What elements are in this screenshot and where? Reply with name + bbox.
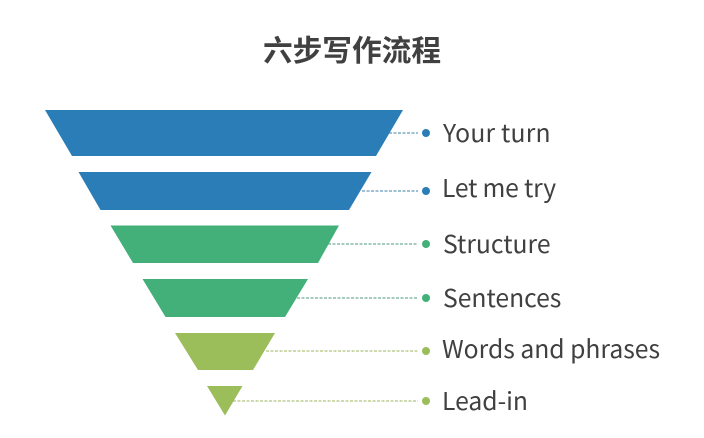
label: Structure: Structure — [443, 225, 551, 261]
label: Let me try — [362, 169, 556, 205]
title: 六步写作流程 — [263, 27, 441, 70]
label: Words and phrases: Words and phrases — [442, 330, 660, 366]
label: Your turn: Your turn — [442, 114, 551, 150]
funnel layer: Your turn — [45, 110, 403, 156]
label: Words and phrases — [266, 330, 660, 366]
funnel layer: Structure — [110, 226, 339, 263]
funnel layer: Let me try — [78, 172, 372, 210]
label: Sentences — [297, 279, 561, 315]
funnel layer: Sentences — [142, 279, 308, 317]
label: Lead-in — [233, 382, 528, 418]
label: Your turn — [389, 114, 551, 150]
funnel layer: Lead-in — [207, 386, 242, 416]
funnel chart — [45, 110, 403, 416]
label: Lead-in: Lead-in — [442, 382, 528, 418]
label: Sentences: Sentences — [443, 279, 561, 315]
funnel layer: Words and phrases — [175, 333, 275, 370]
label: Structure — [328, 225, 551, 261]
label: Let me try: Let me try — [442, 169, 556, 205]
